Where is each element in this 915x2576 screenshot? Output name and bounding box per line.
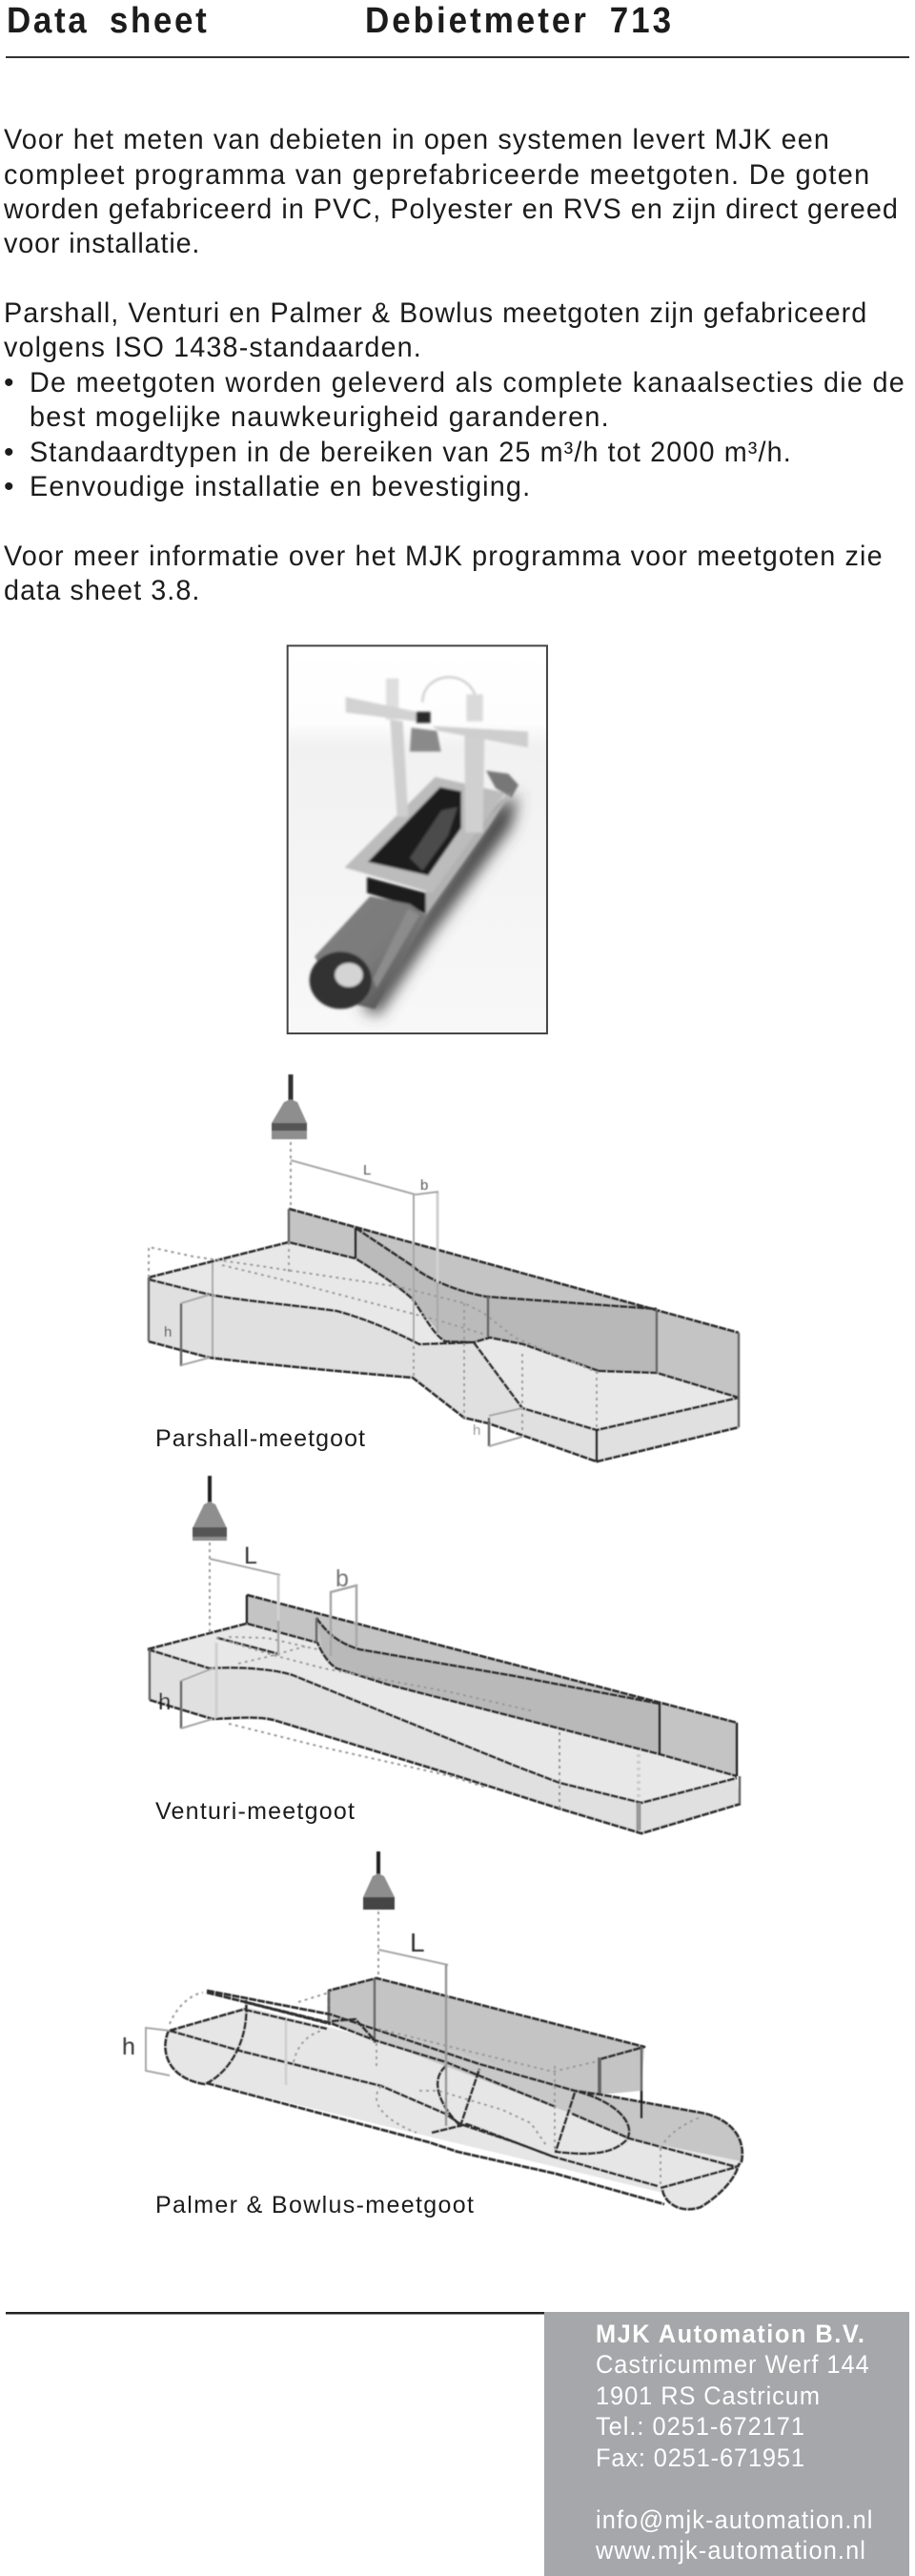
dimension L and b: h bbox=[164, 1324, 172, 1340]
dimension L and b: h bbox=[473, 1422, 480, 1439]
dimension L and b: h bbox=[158, 1689, 171, 1715]
dimensions L and h bbox=[122, 1928, 448, 2126]
caption: Parshall: Parshall-meetgoot bbox=[155, 1425, 365, 1452]
bracket uprights bbox=[390, 720, 408, 817]
header bbox=[6, 0, 909, 58]
header rule bbox=[6, 56, 909, 58]
standards text and bullet list: • bbox=[4, 367, 14, 399]
standards text and bullet list bbox=[4, 296, 905, 502]
panel: contact details bbox=[544, 2312, 909, 2576]
front wall bbox=[148, 1649, 741, 1833]
sensor bbox=[193, 1476, 227, 1541]
product photo bbox=[288, 645, 547, 1033]
web contact: www.mjk-automation.nl bbox=[595, 2535, 865, 2565]
caption: Palmer & Bowlus: Palmer & Bowlus-meetgoot bbox=[155, 2192, 474, 2218]
web contact: info@mjk-automation.nl bbox=[596, 2504, 872, 2534]
dimensions L and h: h bbox=[122, 2034, 135, 2060]
title: Data sheet: Data sheet bbox=[7, 0, 207, 40]
diagram: Palmer & Bowlus flume bbox=[122, 1851, 742, 2209]
bracket crossbars bbox=[346, 697, 429, 723]
flume front bbox=[367, 877, 426, 913]
flume opening bbox=[368, 787, 461, 875]
diagram: Venturi flume bbox=[148, 1476, 741, 1833]
box bbox=[329, 1978, 644, 2095]
sensor bbox=[363, 1851, 395, 1910]
caption: Venturi: Venturi-meetgoot bbox=[155, 1798, 355, 1825]
floor bbox=[148, 1624, 737, 1803]
back wall bbox=[289, 1209, 739, 1398]
sensor bbox=[272, 1074, 307, 1139]
standards text and bullet list: volgens ISO 1438-standaarden. bbox=[4, 331, 421, 363]
footer rule bbox=[6, 2312, 545, 2315]
dimensions L and h: L bbox=[410, 1928, 425, 1957]
outline bbox=[247, 1595, 737, 1723]
address: Castricummer Werf 144 bbox=[596, 2349, 869, 2379]
hidden lines bbox=[170, 1993, 203, 2024]
sensor bbox=[417, 712, 431, 723]
dimension L and b: L bbox=[363, 1162, 371, 1178]
more information text: Voor meer informatie over het MJK programma voor meetgoten zie bbox=[4, 540, 883, 572]
pipe outline bbox=[207, 1991, 742, 2167]
back pipe end bbox=[486, 770, 518, 798]
dimension L and b bbox=[158, 1543, 356, 1728]
intro text block: Voor het meten van debieten in open systemen levert MJK een bbox=[4, 123, 829, 155]
title: Debietmeter 713: Debietmeter 713 bbox=[365, 0, 671, 40]
dimension L and b bbox=[164, 1160, 522, 1446]
lower box strip bbox=[331, 2019, 575, 2114]
dimension L and b: b bbox=[420, 1177, 428, 1194]
intro text block bbox=[3, 123, 898, 259]
company name: MJK Automation B.V. bbox=[596, 2319, 864, 2348]
intro text block: voor installatie. bbox=[4, 227, 199, 259]
intro text block: worden gefabriceerd in PVC, Polyester en RVS en zijn direct gereed bbox=[3, 193, 898, 225]
standards text and bullet list: Standaardtypen in de bereiken van 25 m³/h tot 2000 m³/h. bbox=[30, 436, 791, 468]
diagram: Parshall flume bbox=[149, 1074, 739, 1462]
standards text and bullet list: • bbox=[4, 437, 14, 468]
pipe bbox=[315, 896, 426, 1009]
more information text: data sheet 3.8. bbox=[4, 574, 199, 606]
standards text and bullet list: Parshall, Venturi en Palmer & Bowlus meetgoten zijn gefabriceerd bbox=[4, 296, 866, 329]
standards text and bullet list: best mogelijke nauwkeurigheid garanderen. bbox=[30, 400, 609, 433]
address bbox=[596, 2349, 869, 2472]
front wall bbox=[149, 1278, 739, 1462]
intro text block: compleet programma van geprefabriceerde meetgoten. De goten bbox=[4, 158, 869, 191]
standards text and bullet list: De meetgoten worden geleverd als complete kanaalsecties die de bbox=[30, 366, 905, 399]
address: Fax: 0251-671951 bbox=[596, 2443, 804, 2472]
flume side bbox=[426, 791, 512, 915]
pipe body bbox=[166, 2007, 742, 2209]
hidden lines bbox=[216, 1638, 534, 1711]
floor bbox=[149, 1242, 739, 1430]
hidden lines bbox=[149, 1247, 599, 1373]
dimension L and b: L bbox=[244, 1543, 257, 1569]
web contact bbox=[595, 2504, 872, 2565]
box outline bbox=[329, 1978, 644, 2059]
address: 1901 RS Castricum bbox=[596, 2381, 820, 2410]
back wall bbox=[247, 1595, 737, 1776]
right pipe dark part bbox=[572, 2091, 742, 2161]
flange bbox=[345, 777, 505, 893]
more information text bbox=[4, 540, 883, 606]
outline bbox=[289, 1209, 739, 1333]
address: Tel.: 0251-672171 bbox=[596, 2411, 804, 2441]
standards text and bullet list: • bbox=[4, 471, 14, 502]
pipe ends and cut sections bbox=[166, 2000, 246, 2084]
dimension L and b: b bbox=[336, 1565, 349, 1592]
standards text and bullet list: Eenvoudige installatie en bevestiging. bbox=[30, 470, 530, 502]
